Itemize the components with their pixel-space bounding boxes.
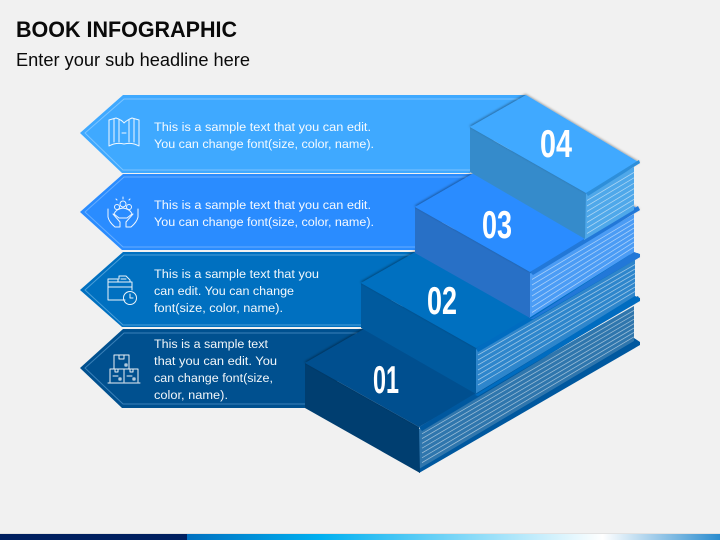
right cover edge <box>586 160 640 196</box>
footer bar <box>0 533 720 540</box>
banner 3 <box>80 174 480 250</box>
left face <box>415 207 530 318</box>
book 03 <box>415 143 640 319</box>
text block: This is a sample text that you can edit. <box>154 198 371 212</box>
top face <box>470 95 640 193</box>
text block: that you can edit. You <box>154 354 277 368</box>
text block: This is a sample text that you can edit. <box>154 120 371 134</box>
text block: You can change font(size, color, name). <box>154 215 374 229</box>
right cover edge <box>530 206 640 275</box>
right cover edge <box>476 253 640 352</box>
lower cover <box>530 252 640 319</box>
subtitle: Enter your sub headline here <box>16 50 250 70</box>
bottom cover <box>419 338 640 473</box>
lower cover <box>475 296 640 396</box>
top face <box>361 219 640 348</box>
banner 1 <box>80 329 370 408</box>
text block: color, name). <box>154 388 228 402</box>
text block: font(size, color, name). <box>154 301 283 315</box>
number: 03 <box>482 204 512 247</box>
title: BOOK INFOGRAPHIC <box>16 17 237 42</box>
left face <box>470 127 586 239</box>
text block: This is a sample text that you <box>154 267 319 281</box>
book 04 <box>470 95 640 240</box>
icon: folder and clock <box>108 276 136 304</box>
right cover edge <box>419 296 640 431</box>
pages <box>419 306 634 469</box>
banner 2 <box>80 252 430 327</box>
pages <box>584 167 634 240</box>
number: 01 <box>373 359 399 402</box>
text block: You can change font(size, color, name). <box>154 137 374 151</box>
text block: This is a sample text <box>154 337 269 351</box>
pages <box>475 260 635 394</box>
number: 04 <box>540 123 572 166</box>
text block: can change font(size, <box>154 371 273 385</box>
left face <box>305 363 420 473</box>
text block: can edit. You can change <box>154 284 294 298</box>
top face <box>305 299 640 427</box>
book 02 <box>361 219 640 396</box>
left face <box>361 283 476 394</box>
book 01 <box>305 296 640 473</box>
top face <box>415 143 640 272</box>
icon: hands holding people <box>108 197 138 227</box>
number: 02 <box>427 280 457 323</box>
pages <box>529 214 634 318</box>
icon: stacked boxes <box>108 355 140 383</box>
banner 4: top step <box>80 95 526 173</box>
icon: open book <box>109 118 139 146</box>
